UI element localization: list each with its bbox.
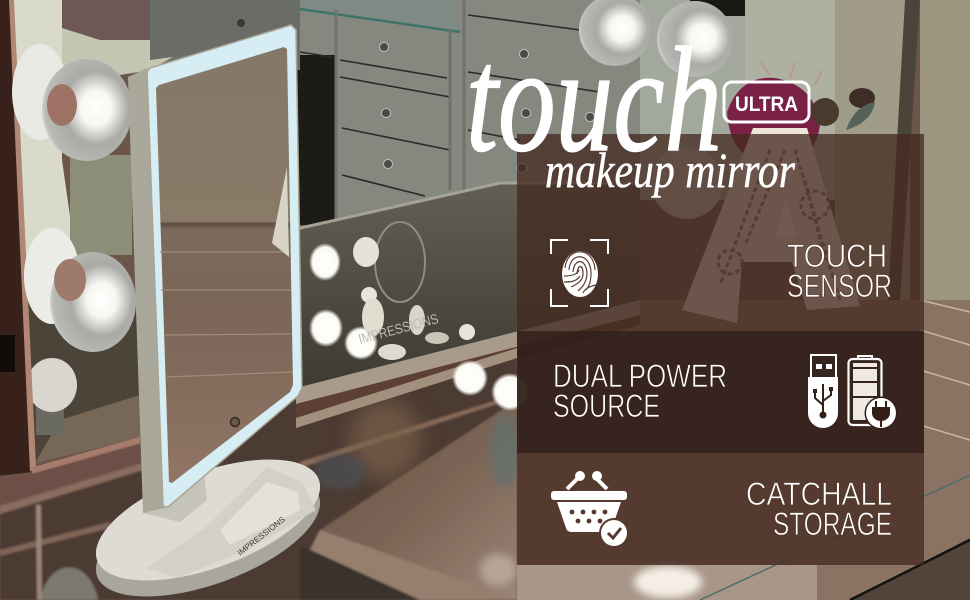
text: dual power source xyxy=(553,358,727,424)
light bulbs xyxy=(12,0,733,352)
title: touch makeup mirror: touch xyxy=(466,17,722,183)
text: catchall storage xyxy=(746,476,892,542)
text: dual power source: DUAL POWER xyxy=(553,358,727,394)
badge: ULTRA xyxy=(724,82,809,122)
text: catchall storage: CATCHALL xyxy=(746,476,892,512)
text: touch sensor: TOUCH xyxy=(787,238,887,274)
icon: battery with plug xyxy=(848,356,898,430)
left wall behind bulbs xyxy=(0,0,300,476)
mirror glass xyxy=(156,47,293,483)
icon: fingerprint xyxy=(551,240,608,306)
panel: features overlay xyxy=(517,134,924,565)
title: touch makeup mirror: makeup mirror xyxy=(545,142,795,198)
icon: basket with check xyxy=(551,471,629,548)
glass box with reflections xyxy=(296,183,640,428)
mirror base: IMPRESSIONS xyxy=(236,515,287,558)
text: touch sensor xyxy=(787,238,892,304)
icon: usb stick xyxy=(808,355,838,428)
mirror sticker xyxy=(272,167,289,257)
mirror LED frame xyxy=(147,25,302,507)
reflected lights in the glass box: IMPRESSIONS xyxy=(357,310,440,347)
lower right floor xyxy=(517,300,970,600)
text: touch sensor: SENSOR xyxy=(787,268,892,304)
wall and mirror edge xyxy=(640,0,970,300)
makeup mirror xyxy=(81,25,335,600)
table and glass xyxy=(0,335,520,600)
text: catchall storage: STORAGE xyxy=(773,506,892,542)
badge: ULTRA: ULTRA xyxy=(735,93,798,116)
touch button xyxy=(230,418,240,426)
drawers xyxy=(290,0,640,244)
mirror base xyxy=(81,435,335,600)
mirror stand xyxy=(143,470,207,522)
text: dual power source: SOURCE xyxy=(553,388,660,424)
mirror side edge xyxy=(128,68,165,513)
letter A decoration xyxy=(682,128,860,323)
reflected lights in the glass box xyxy=(309,237,529,411)
flowers xyxy=(727,62,875,153)
